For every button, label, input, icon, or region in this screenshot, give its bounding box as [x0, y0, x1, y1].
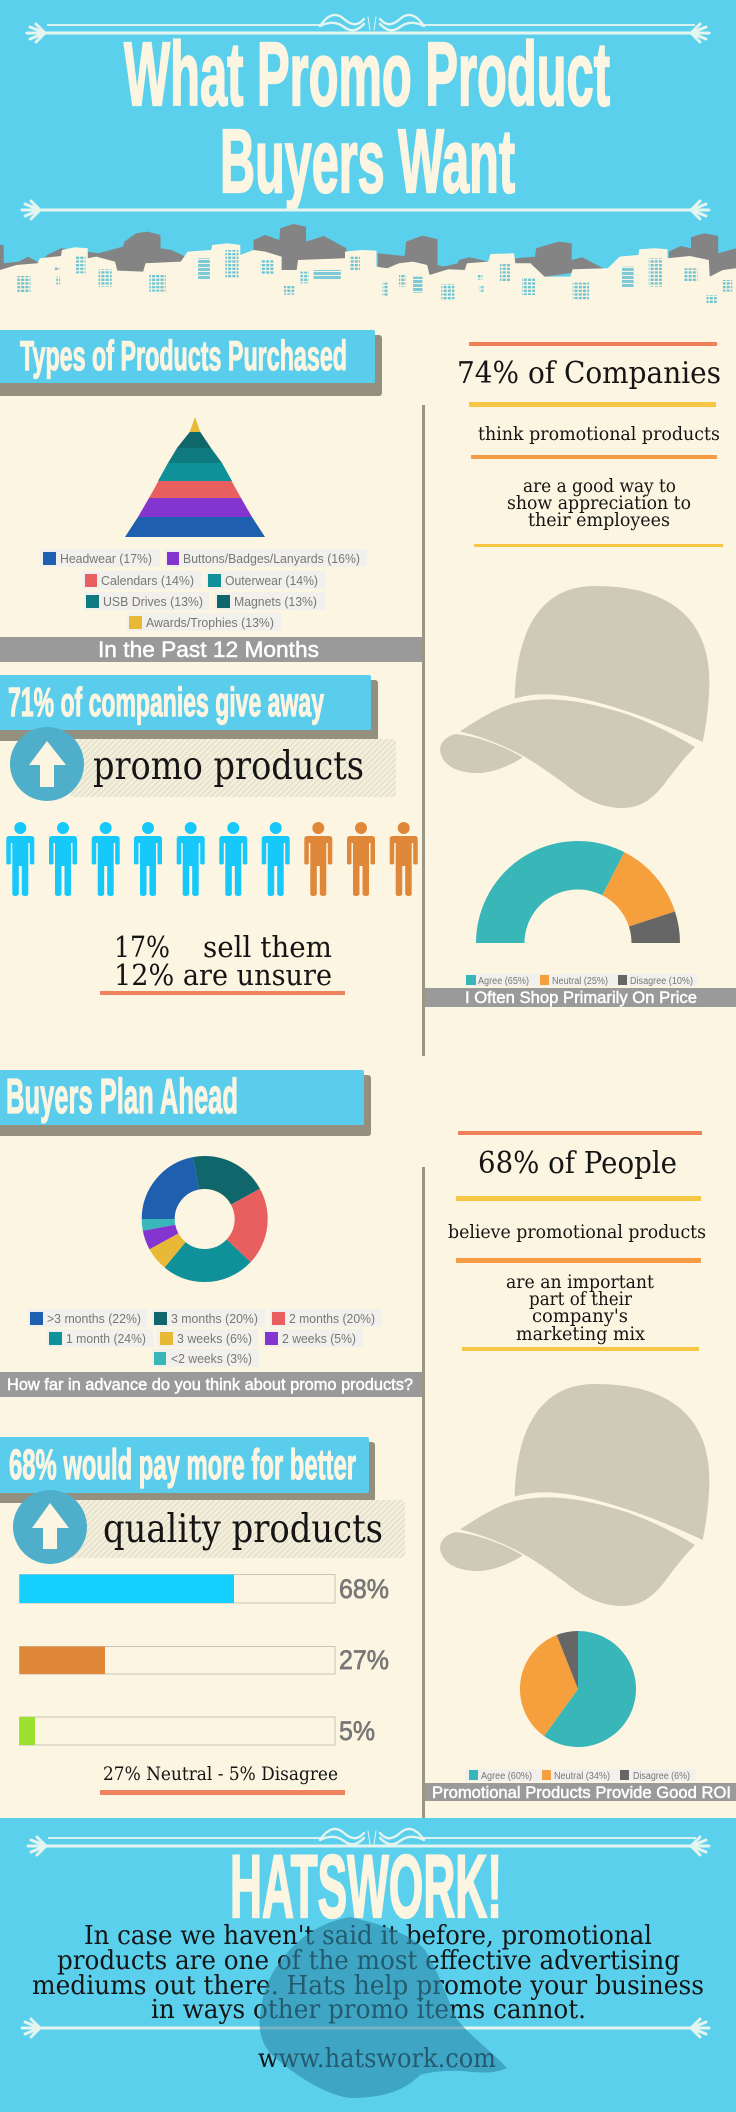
text: neutral and disagree — [100, 1763, 345, 1795]
legend: lead time: 1 month (24%) — [66, 1331, 146, 1346]
caption bar: price: I Often Shop Primarily On Price — [465, 988, 697, 1007]
legend: lead time: 2 months (20%) — [289, 1311, 375, 1326]
heading: types of products — [0, 330, 382, 396]
legend: lead time — [28, 1309, 382, 1367]
panel: 74 percent of companies: show appreciation to — [507, 492, 691, 514]
legend: products: Headwear (17%) — [60, 551, 152, 566]
panel: 74 percent of companies: think promotional products — [478, 423, 720, 445]
footer paragraph: in ways other promo items cannot. — [151, 1995, 586, 2025]
title — [124, 25, 610, 212]
bar: 68 percent — [20, 1574, 389, 1604]
panel: pay more for quality — [0, 1437, 405, 1795]
bar: 27 percent — [20, 1645, 389, 1675]
top ornament — [27, 15, 709, 42]
footer paragraph — [32, 1921, 704, 2025]
bar: 27 percent: 27% — [339, 1645, 389, 1675]
panel: 68 percent of people: are an important — [506, 1271, 654, 1293]
bar: 5 percent: 5% — [339, 1716, 375, 1746]
quality products strip — [13, 1490, 405, 1564]
icon: hat, upper — [440, 586, 709, 808]
legend: ROI: Neutral (34%) — [554, 1771, 610, 1782]
divider: upper — [422, 405, 425, 1056]
panel: 74 percent of companies — [457, 342, 723, 547]
footer url: www.hatswork.com — [258, 2044, 496, 2074]
caption bar: past 12 months: In the Past 12 Months — [98, 637, 319, 662]
footer paragraph: In case we haven't said it before, promotional — [84, 1921, 652, 1951]
footer bottom ornament — [22, 2019, 709, 2037]
panel: 68 percent of people: believe promotional products — [448, 1221, 706, 1243]
icon: hat, lower — [440, 1384, 709, 1606]
legend: products — [40, 549, 367, 631]
heading: 68 percent pay more — [0, 1437, 375, 1503]
panel: 68 percent of people — [448, 1131, 706, 1351]
promo products strip: promo products — [93, 744, 364, 789]
legend: products: Magnets (13%) — [234, 594, 317, 609]
legend: price: Agree (65%) — [478, 976, 529, 987]
panel: 68 percent of people: 68% of People — [478, 1146, 677, 1181]
panel: 68 percent of people: company's — [532, 1305, 628, 1327]
pyramid chart — [125, 417, 265, 537]
heading: 71 percent: 71% of companies give away — [8, 679, 324, 725]
panel: footer — [0, 1818, 736, 2112]
footer paragraph: products are one of the most effective advertising — [57, 1946, 680, 1976]
quality products strip: quality products — [103, 1507, 383, 1552]
chart: shop on price — [425, 841, 736, 1007]
heading: 68 percent pay more: 68% would pay more for better — [9, 1441, 356, 1489]
heading: 71 percent — [0, 675, 378, 741]
divider: lower — [422, 1167, 425, 1818]
donut chart — [158, 1172, 251, 1266]
promo products strip — [10, 727, 396, 801]
heading: types of products: Types of Products Purchased — [20, 332, 347, 379]
caption bar: past 12 months — [0, 637, 422, 662]
legend: products: Calendars (14%) — [101, 573, 194, 588]
heading: buyers plan ahead — [0, 1070, 371, 1136]
panel: 74 percent of companies: their employees — [528, 509, 670, 531]
panel: header — [0, 0, 736, 347]
legend: products: Outerwear (14%) — [225, 573, 318, 588]
icon: up arrow — [10, 727, 84, 801]
panel: companies give away — [0, 675, 418, 995]
icon: watermark hat — [260, 1917, 507, 2098]
legend: lead time: 2 weeks (5%) — [282, 1331, 356, 1346]
caption bar: how far in advance: How far in advance do you think about promo products? — [7, 1375, 413, 1394]
pie chart — [520, 1631, 636, 1747]
chart: good ROI — [425, 1631, 736, 1802]
caption bar: ROI: Promotional Products Provide Good ROI — [432, 1783, 731, 1802]
bar: 68 percent: 68% — [339, 1574, 389, 1604]
legend: products: Awards/Trophies (13%) — [146, 615, 274, 630]
legend: ROI: Disagree (6%) — [633, 1771, 690, 1782]
skyline — [0, 224, 736, 347]
icon: up arrow — [13, 1490, 87, 1564]
legend: products: USB Drives (13%) — [103, 594, 203, 609]
legend: lead time: 3 months (20%) — [171, 1311, 258, 1326]
panel: 68 percent of people: marketing mix — [516, 1323, 645, 1345]
text: sell them, unsure: 17% — [114, 930, 170, 964]
text: sell them, unsure: 12% are unsure — [114, 958, 332, 992]
footer paragraph: mediums out there. Hats help promote your business — [32, 1971, 704, 2001]
legend: ROI: Agree (60%) — [481, 1771, 532, 1782]
bar chart — [20, 1574, 389, 1746]
footer top ornament — [28, 1829, 709, 1855]
legend: price — [465, 974, 698, 987]
legend: lead time: >3 months (22%) — [47, 1311, 141, 1326]
semi-donut chart — [476, 841, 680, 943]
text: neutral and disagree: 27% Neutral - 5% Disagree — [103, 1763, 338, 1785]
legend: price: Neutral (25%) — [552, 976, 608, 987]
panel: types of products — [0, 330, 422, 662]
panel: 74 percent of companies: are a good way to — [523, 475, 676, 497]
panel: 68 percent of people: part of their — [529, 1288, 633, 1310]
legend: ROI — [465, 1769, 696, 1782]
legend: price: Disagree (10%) — [630, 976, 693, 987]
bar: 5 percent — [20, 1716, 375, 1746]
legend: lead time: <2 weeks (3%) — [171, 1351, 252, 1366]
legend: products: Buttons/Badges/Lanyards (16%) — [183, 551, 360, 566]
legend: lead time: 3 weeks (6%) — [177, 1331, 252, 1346]
panel: buyers plan ahead — [0, 1070, 422, 1397]
panel: 74 percent of companies: 74% of Companies — [457, 356, 721, 391]
pictogram: people — [6, 822, 418, 896]
heading: buyers plan ahead: Buyers Plan Ahead — [6, 1070, 238, 1124]
text: sell them, unsure: sell them — [203, 930, 332, 964]
text: sell them, unsure — [100, 930, 345, 995]
bottom ornament — [22, 201, 709, 219]
